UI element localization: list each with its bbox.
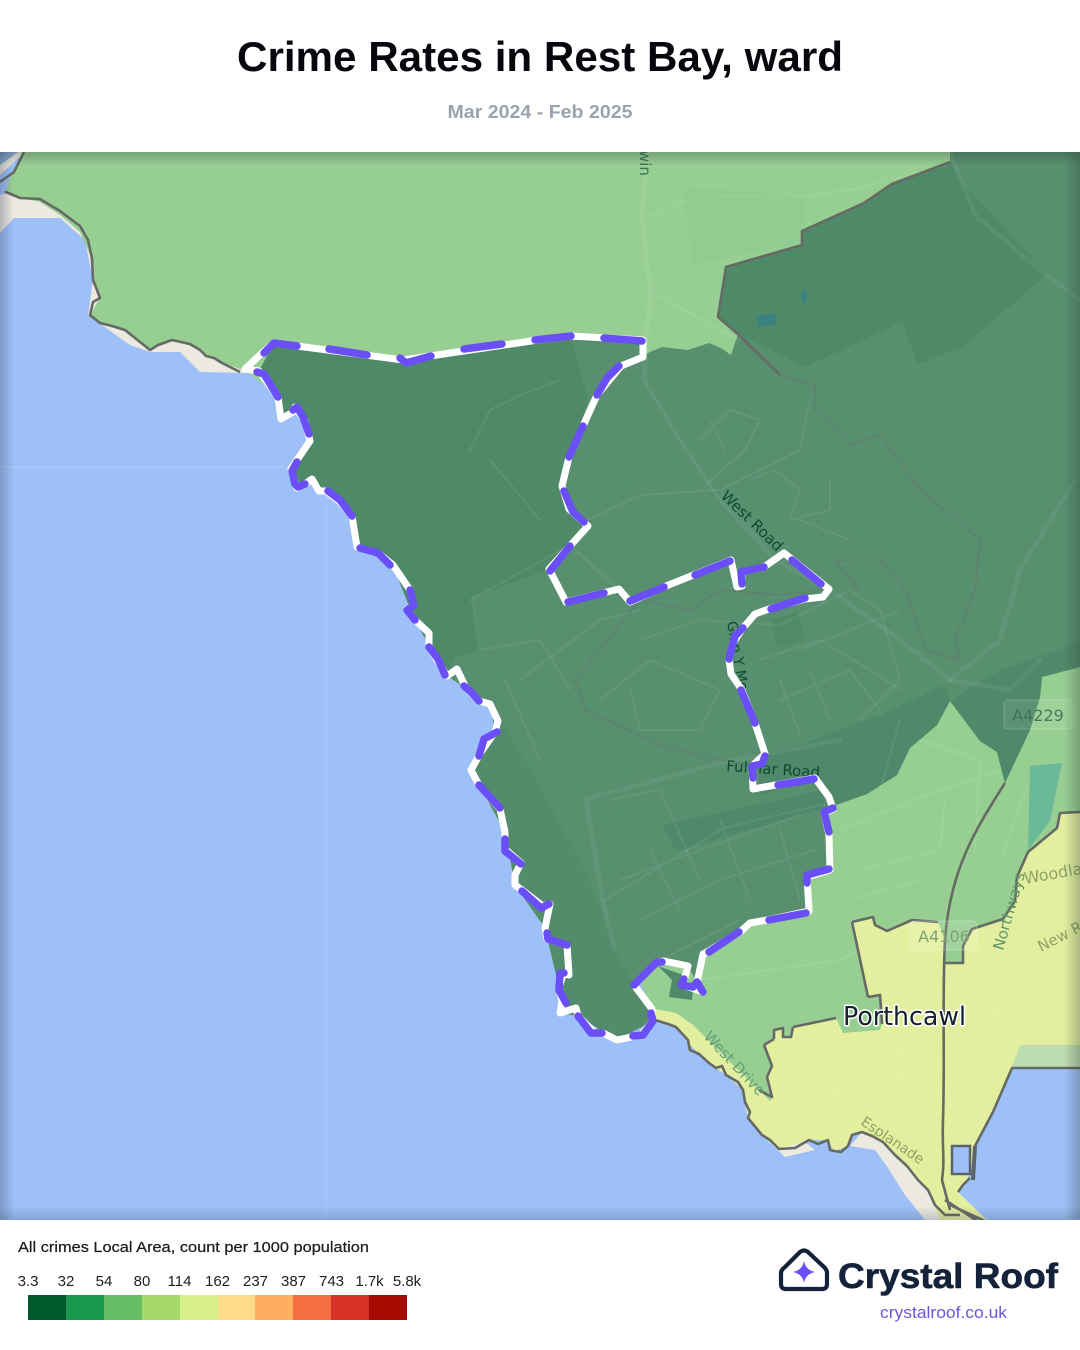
legend	[18, 1239, 422, 1320]
field patch	[683, 188, 805, 264]
darker zone: ward south coastal strip	[487, 716, 645, 1034]
road label: Northways: Northways	[990, 870, 1029, 952]
mid green zone	[259, 152, 1080, 1040]
road label: win: win	[636, 150, 654, 176]
harbour	[952, 1146, 970, 1174]
legend title: All crimes Local Area, count per 1000 population	[18, 1239, 369, 1256]
sand NW tip water	[0, 152, 18, 165]
legend values: 114	[168, 1273, 191, 1290]
pale band	[1012, 1045, 1080, 1067]
map edge shading	[0, 152, 1080, 1220]
logo url: crystalroof.co.uk	[880, 1304, 1008, 1322]
legend values: 387	[281, 1273, 306, 1290]
legend values: 3.3	[18, 1273, 38, 1290]
coastlines	[0, 152, 1080, 1226]
legend values	[18, 1273, 422, 1290]
ward boundary: white outline	[245, 336, 833, 1040]
legend values: 1.7k	[355, 1273, 384, 1290]
road badge: A4106	[910, 921, 977, 950]
logo: Crystal Roof	[781, 1250, 1058, 1322]
map labels	[636, 150, 1080, 1168]
legend values: 5.8k	[393, 1273, 422, 1290]
darker patch: field inside ward	[664, 794, 822, 849]
road label: West Drive: West Drive	[700, 1027, 769, 1099]
road badge: A4106: A4106	[918, 927, 970, 946]
legend values: 80	[134, 1273, 150, 1290]
beach sand	[0, 152, 945, 1220]
road label: Fulmar Road: Fulmar Road	[726, 757, 821, 782]
road label: West Road: West Road	[717, 487, 787, 555]
legend values: 32	[58, 1273, 74, 1290]
darker zone: south-east residential	[757, 685, 950, 806]
choropleth map	[0, 150, 1080, 1226]
logo wordmark: Crystal Roof	[838, 1257, 1058, 1296]
yellow low-crime zone	[655, 812, 1080, 1220]
darker zone: east pocket	[950, 642, 1080, 783]
legend colour scale	[28, 1295, 407, 1320]
road label: Glan: Glan Y Mor	[723, 620, 752, 698]
legend values: 54	[96, 1273, 112, 1290]
footpaths	[575, 317, 980, 765]
teal ponds	[757, 313, 776, 327]
subtitle: date range: Mar 2024 - Feb 2025	[448, 102, 632, 122]
road label: Esplanade: Esplanade	[858, 1114, 927, 1168]
place label: Porthcawl: Porthcawl	[843, 1002, 966, 1032]
darker zone: north-east fields	[718, 162, 1047, 367]
road badge: A4229	[1004, 700, 1072, 729]
darker zone: ward west	[259, 338, 588, 676]
pond	[1028, 763, 1062, 850]
light green land	[5, 152, 1080, 1101]
road network	[469, 163, 1070, 958]
ward boundary: purple dashes	[257, 336, 833, 1036]
road badge: A4229: A4229	[1012, 706, 1064, 725]
legend values: 162	[205, 1273, 230, 1290]
icon: house with star	[781, 1250, 827, 1289]
legend values: 237	[243, 1273, 268, 1290]
legend values: 743	[319, 1273, 344, 1290]
title: Crime Rates in Rest Bay, ward	[237, 33, 843, 80]
water	[0, 152, 1080, 1220]
